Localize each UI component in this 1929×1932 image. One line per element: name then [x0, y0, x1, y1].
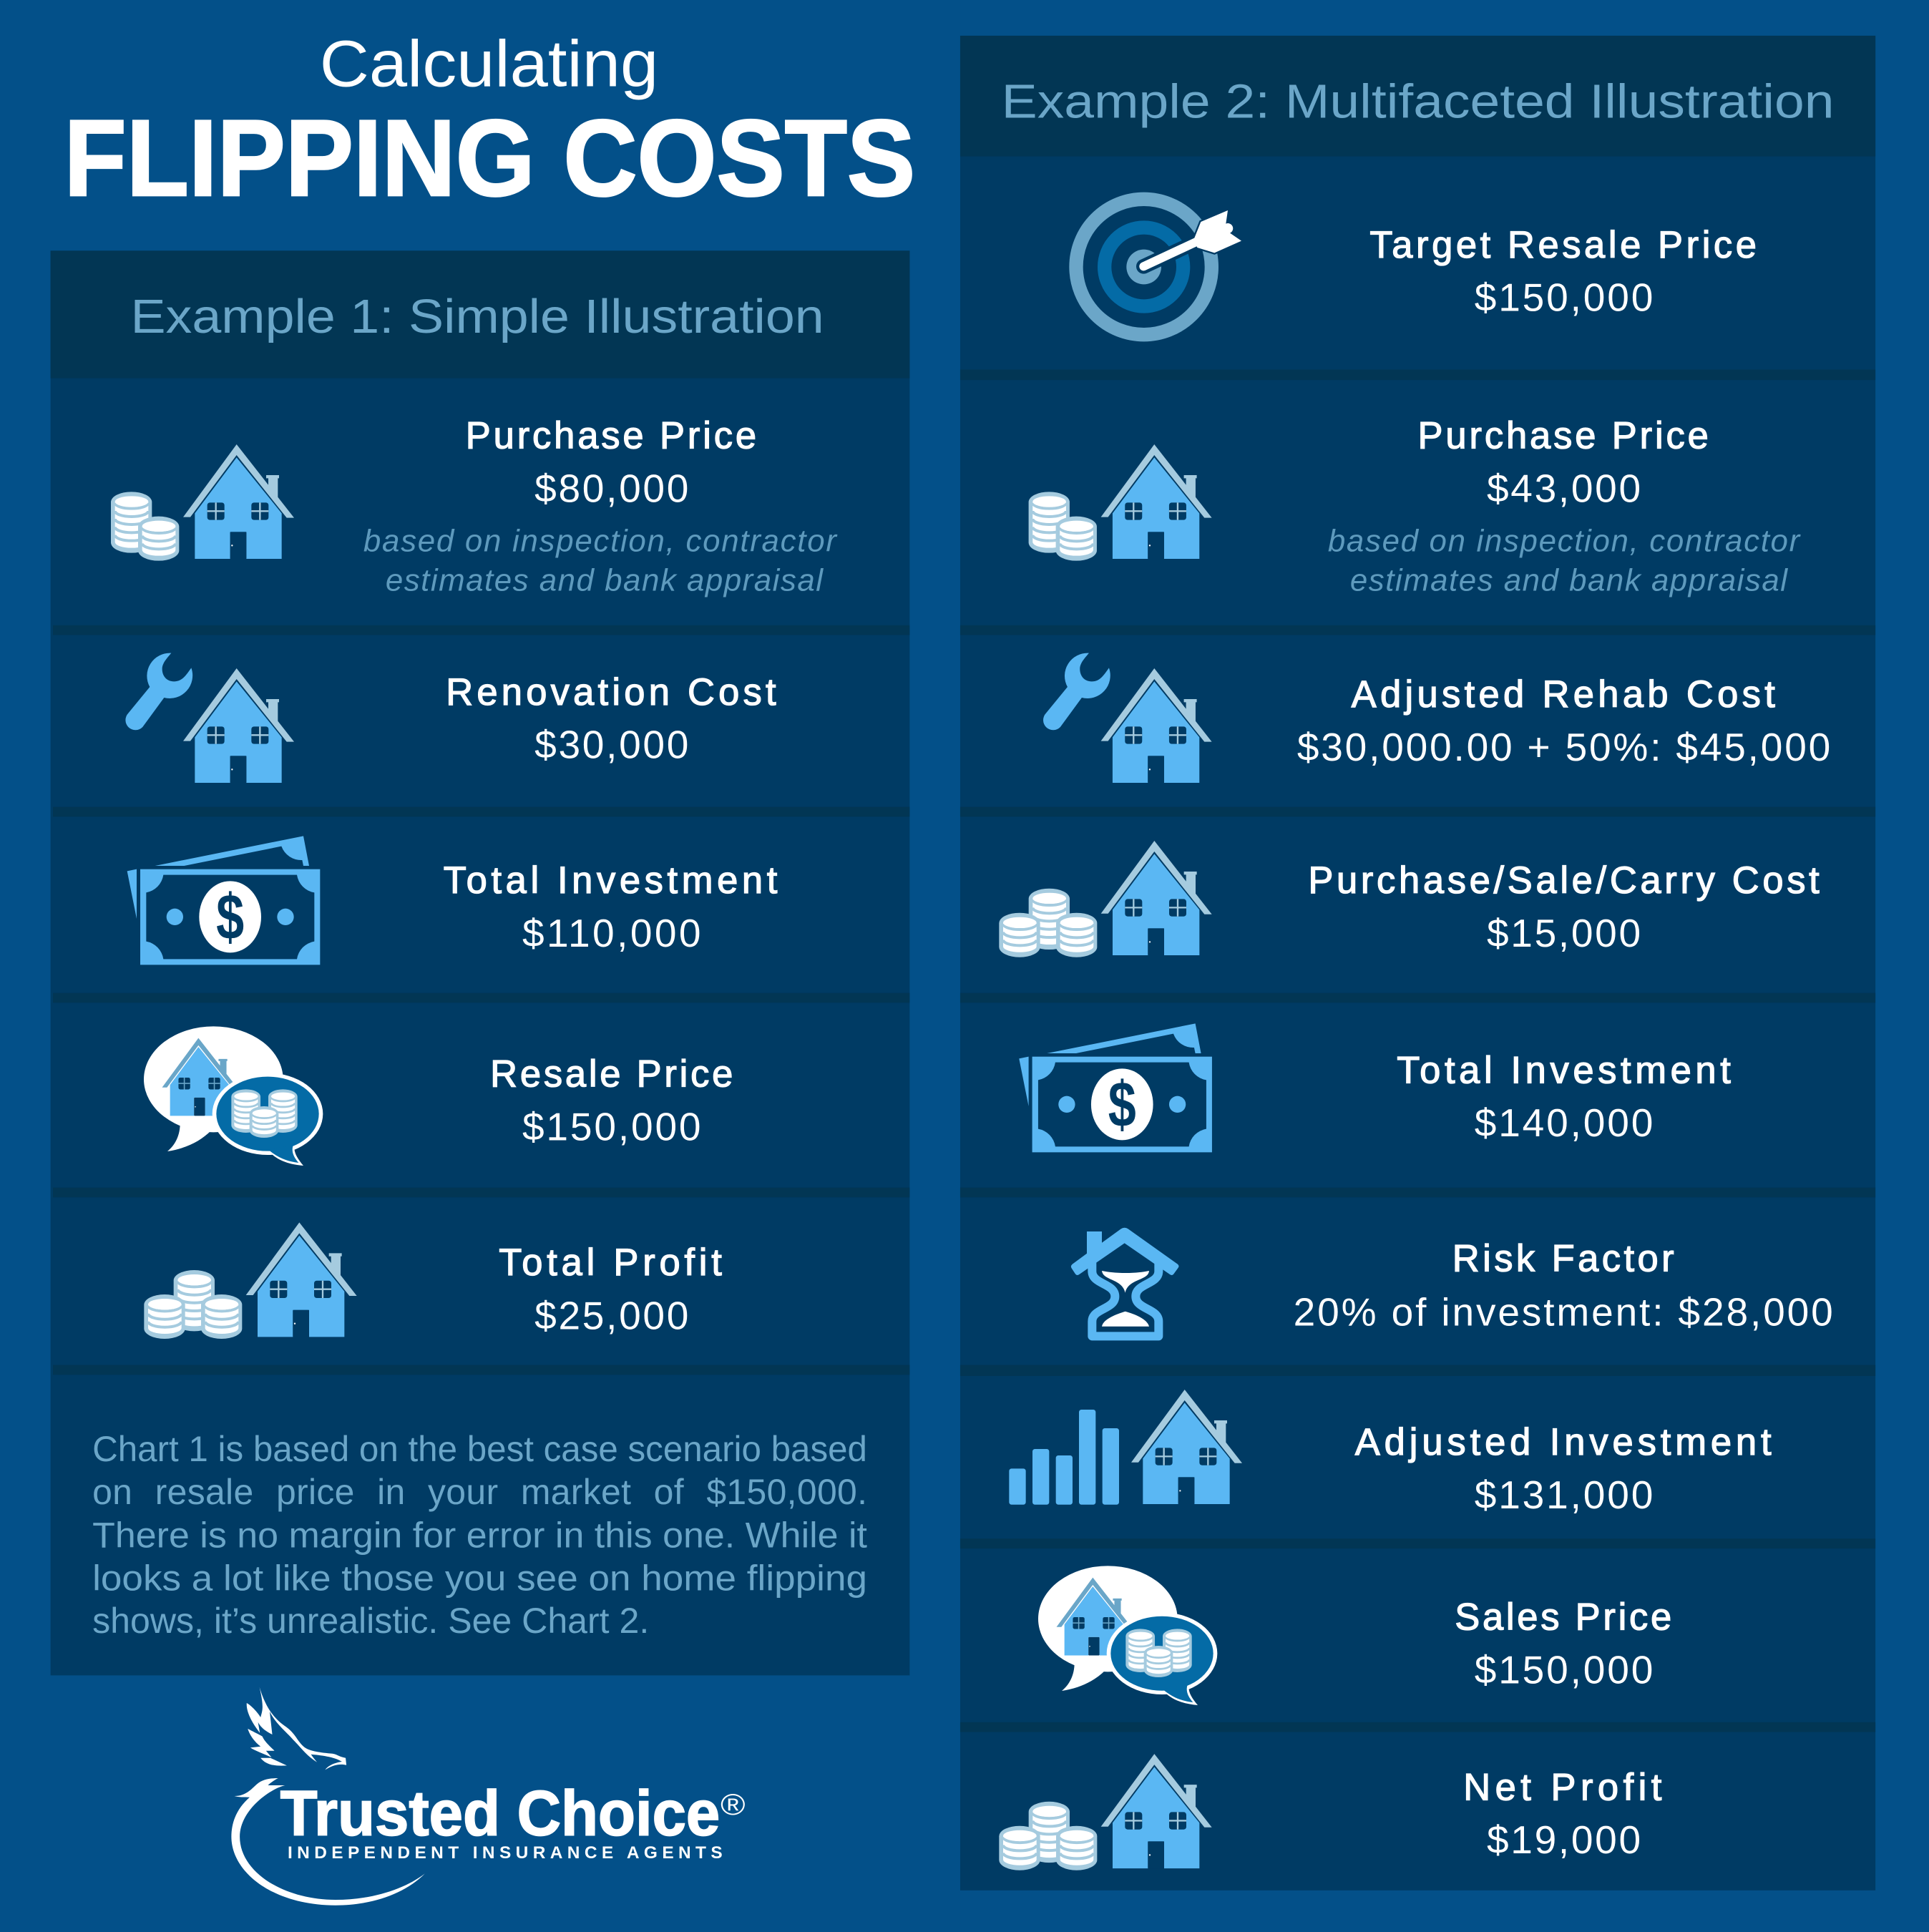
icon: coin stacks and house — [999, 1754, 1212, 1870]
icon: coin stacks and house — [999, 841, 1212, 957]
note: based on inspection: based on inspection, contractor — [1328, 523, 1802, 558]
explanatory text — [92, 1429, 867, 1641]
explanatory text: shows, it’s unrealistic. See Chart 2. — [92, 1601, 649, 1641]
value: $150,000: $150,000 — [522, 1104, 701, 1148]
title line: Flipping Costs: FLIPPING COSTS — [64, 98, 915, 219]
explanatory text: looks a lot like those you see on home flipping — [92, 1558, 867, 1599]
note: estimates and appraisal: estimates and bank appraisal — [386, 563, 824, 598]
value: $15,000: $15,000 — [1487, 911, 1641, 955]
value: $25,000: $25,000 — [534, 1294, 688, 1338]
label: Target Resale Price: Target Resale Price — [1369, 224, 1757, 266]
title — [64, 27, 915, 219]
row: Target Resale Price — [1076, 199, 1757, 335]
icon: speech bubbles — [1038, 1566, 1217, 1705]
icon: banknotes — [1019, 1023, 1212, 1152]
icon: coins and house — [111, 444, 294, 561]
value: $110,000: $110,000 — [522, 911, 701, 955]
panel: Example 2 — [960, 36, 1875, 1890]
row: Total Investment — [127, 836, 778, 965]
icon: banknotes: $ — [1108, 1069, 1136, 1141]
row: Total Investment — [1019, 1023, 1731, 1152]
icon: target and arrow — [1076, 199, 1241, 335]
panel heading: Example 1: Example 1: Simple Illustration — [130, 290, 824, 343]
logo registered mark: ® — [721, 1788, 746, 1821]
panel: Example 1 — [51, 250, 909, 1675]
value: $30,000: $30,000 — [534, 723, 688, 767]
row: Risk Factor — [1071, 1228, 1833, 1336]
icon: speech bubbles — [144, 1026, 323, 1166]
value: $150,000: $150,000 — [1475, 1648, 1653, 1692]
icon: bar chart and house — [1009, 1390, 1242, 1505]
icon: wrench and house — [1043, 653, 1212, 783]
icon: coins and house — [1029, 444, 1212, 561]
label: Purchase Price: Purchase Price — [1418, 415, 1709, 457]
row: Sales Price — [1038, 1566, 1671, 1705]
label: Net Profit: Net Profit — [1463, 1766, 1662, 1808]
value: $150,000: $150,000 — [1475, 275, 1653, 320]
explanatory text: on resale price in your market of $150,000. — [92, 1472, 867, 1512]
value: $80,000: $80,000 — [534, 467, 688, 511]
note: based on inspection: based on inspection, contractor — [363, 523, 838, 558]
icon: coin stacks and house — [144, 1222, 357, 1339]
row: Adjusted Investment — [1009, 1390, 1772, 1517]
note: estimates and appraisal: estimates and bank appraisal — [1350, 563, 1788, 598]
row: Net Profit — [999, 1754, 1662, 1870]
logo tagline: INDEPENDENT INSURANCE AGENTS — [288, 1843, 723, 1863]
panel heading: Example 1 — [51, 250, 909, 379]
panel heading: Example 2 — [960, 36, 1875, 157]
value: $131,000: $131,000 — [1475, 1473, 1653, 1517]
label: Adjusted Rehab Cost: Adjusted Rehab Cost — [1352, 673, 1775, 716]
logo: Trusted Choice — [231, 1687, 746, 1906]
panel heading: Example 2: Example 2: Multifaceted Illustration — [1002, 74, 1834, 128]
row: Purchase Price — [1029, 415, 1802, 598]
logo wordmark: Trusted Choice — [280, 1777, 720, 1848]
icon: banknotes: $ — [216, 882, 244, 954]
label: Purchase Price: Purchase Price — [466, 415, 756, 457]
icon: house hourglass — [1071, 1228, 1179, 1336]
label: Total Investment: Total Investment — [444, 859, 778, 902]
icon: wrench and house — [125, 653, 294, 783]
row: Purchase/Sale/Carry Cost — [999, 841, 1820, 957]
label: Total Profit: Total Profit — [499, 1241, 722, 1284]
explanatory text: There is no margin for error in this one. While it — [92, 1515, 867, 1555]
row: Adjusted Rehab Cost — [1043, 653, 1830, 783]
row: Renovation Cost — [125, 653, 776, 783]
logo mark: eagle and swoosh — [231, 1687, 425, 1906]
label: Resale Price: Resale Price — [490, 1053, 733, 1095]
value: $140,000: $140,000 — [1475, 1101, 1653, 1145]
value: rehab calculation: $30,000.00 + 50%: $45,000 — [1297, 725, 1830, 769]
row: Resale Price — [144, 1026, 733, 1166]
label: Sales Price: Sales Price — [1455, 1596, 1671, 1639]
label: Total Investment: Total Investment — [1397, 1049, 1731, 1091]
icon: banknotes — [127, 836, 320, 965]
label: Renovation Cost: Renovation Cost — [446, 671, 776, 713]
value: $43,000: $43,000 — [1487, 467, 1641, 511]
title line: Calculating: Calculating — [320, 27, 658, 101]
label: Adjusted Investment: Adjusted Investment — [1355, 1421, 1772, 1463]
explanatory text: Chart 1 is based on the best case scenario based — [92, 1429, 867, 1469]
value: risk calculation: 20% of investment: $28,000 — [1294, 1289, 1833, 1334]
label: Purchase/Sale/Carry Cost: Purchase/Sale/Carry Cost — [1308, 859, 1820, 902]
label: Risk Factor: Risk Factor — [1452, 1238, 1674, 1280]
row: Purchase Price — [111, 415, 838, 598]
row: Total Profit — [144, 1222, 722, 1339]
value: $19,000: $19,000 — [1487, 1818, 1641, 1862]
